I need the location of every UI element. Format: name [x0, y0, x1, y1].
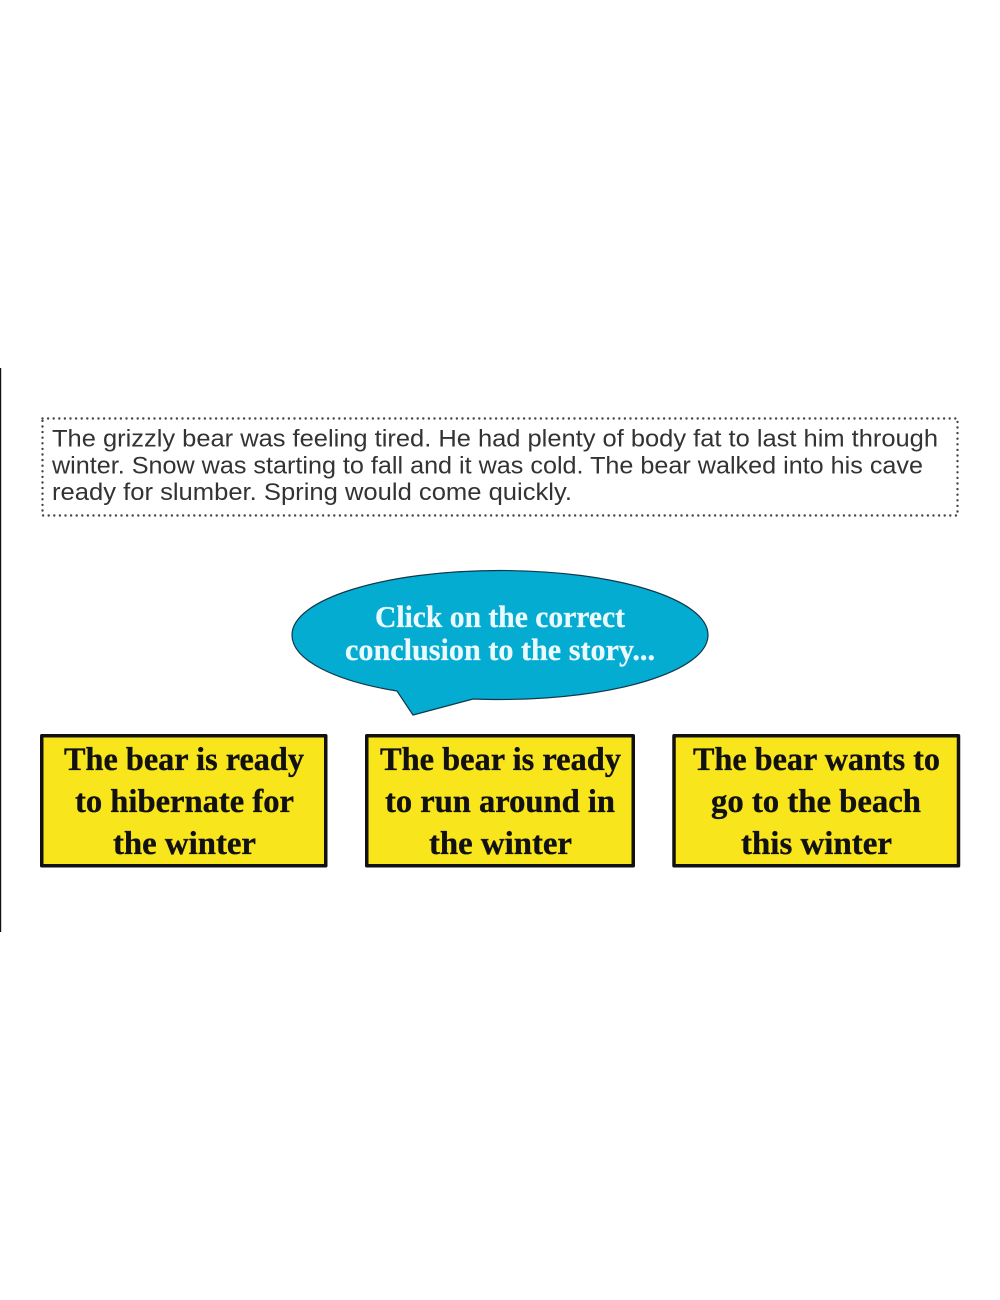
option 3 text: this winter	[741, 826, 892, 862]
callout: instruction speech bubble	[292, 570, 708, 715]
option 3 text	[693, 742, 940, 862]
speech bubble shape	[292, 570, 708, 715]
option 2 text	[380, 742, 621, 862]
instruction text: conclusion to the story...	[345, 632, 655, 667]
panel: answer option 1	[42, 736, 326, 866]
option 1 box	[42, 736, 326, 866]
panel: answer option 3	[674, 736, 958, 866]
instruction text	[345, 599, 655, 667]
story text: ready for slumber. Spring would come quickly.	[52, 479, 572, 506]
option 2 text: The bear is ready	[380, 742, 621, 778]
left edge line	[0, 368, 1, 932]
panel: story passage	[42, 418, 958, 516]
option 1 text: to hibernate for	[75, 784, 294, 820]
option 3 text: go to the beach	[711, 784, 921, 820]
option 1 text: The bear is ready	[64, 742, 304, 778]
option 2 box	[367, 736, 633, 866]
option 1 text: the winter	[113, 826, 256, 862]
option 2 text: the winter	[429, 826, 572, 862]
option 2 text: to run around in	[385, 784, 615, 820]
instruction text: Click on the correct	[375, 599, 626, 634]
story text	[51, 426, 938, 506]
story text: The grizzly bear was feeling tired. He had plenty of body fat to last him through	[52, 426, 938, 452]
option 3 text: The bear wants to	[693, 742, 940, 778]
option 1 text	[64, 742, 304, 862]
panel: answer option 2	[367, 736, 633, 866]
dotted border	[42, 418, 958, 516]
option 3 box	[674, 736, 958, 866]
story text: winter. Snow was starting to fall and it was cold. The bear walked into his cave	[51, 452, 923, 480]
